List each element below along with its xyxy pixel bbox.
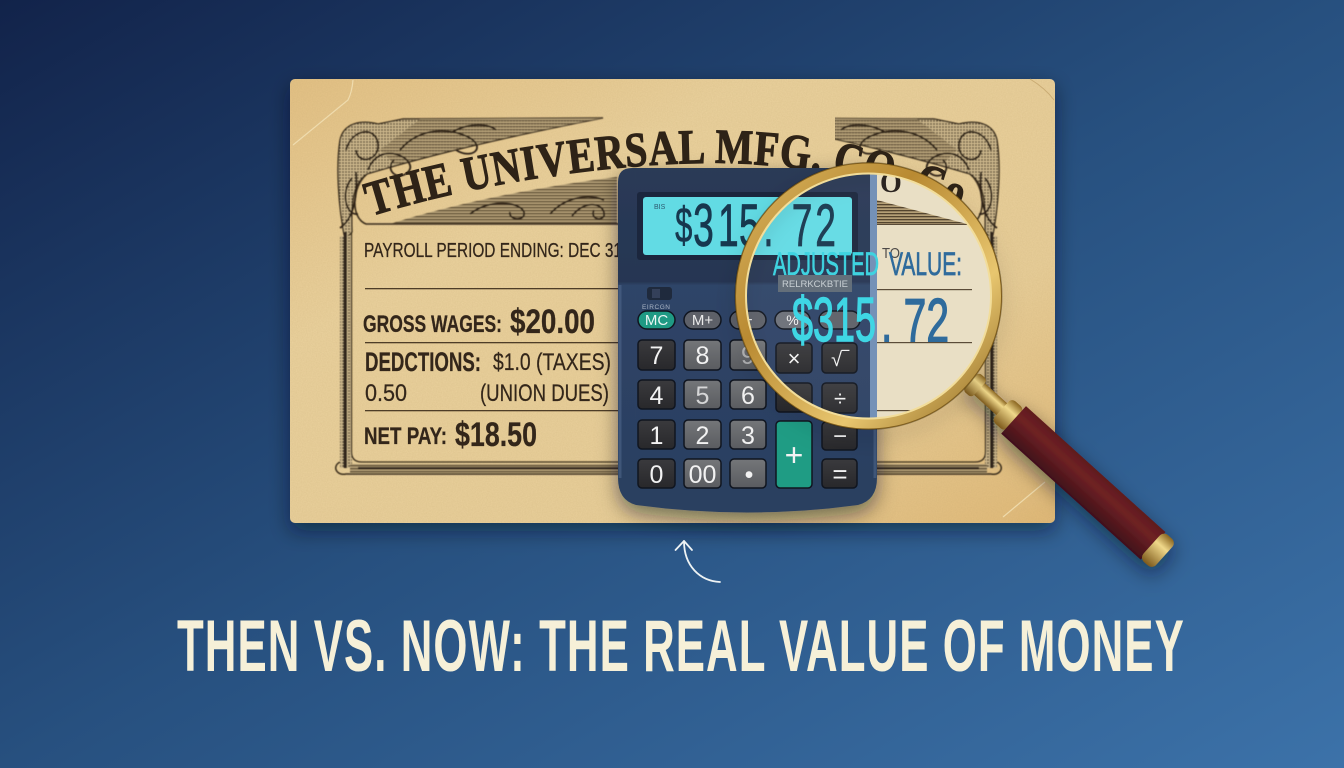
wooden grip [1001, 406, 1165, 560]
small caption chip [778, 275, 852, 292]
deductions rows: $1.0 (TAXES) [493, 349, 611, 376]
payroll period line: PAYROLL PERIOD ENDING: DEC 31 [364, 240, 622, 262]
key labels: 0 [650, 461, 663, 489]
key labels: 7 [650, 342, 663, 370]
deductions rows: DEDCTIONS: [365, 347, 481, 377]
brass end cap [1140, 531, 1176, 569]
key labels: 6 [741, 382, 755, 410]
lens contents: O [880, 168, 902, 199]
slide switch: EIRCGN [642, 304, 670, 311]
gross wages row: $20.00 [510, 303, 595, 341]
calculator display: 315.72 [693, 192, 836, 259]
lens contents [748, 174, 990, 418]
small caption chip: RELRKCKBTIE [782, 279, 848, 290]
calculator display: BIS [654, 204, 666, 211]
deductions rows [365, 347, 611, 407]
key labels: × [788, 346, 800, 371]
key labels [650, 342, 850, 489]
memory and function keys row: % [786, 312, 799, 328]
memory and function keys row: − [743, 312, 753, 329]
brass neck [970, 379, 1012, 419]
memory and function keys row: MC [645, 312, 668, 329]
key labels: ÷ [834, 386, 846, 411]
calculator [618, 168, 877, 512]
net pay row: $18.50 [455, 416, 537, 454]
key labels: 3 [741, 422, 755, 450]
lens amount: 315.72 [792, 294, 948, 346]
key labels: 00 [689, 461, 716, 489]
key labels: 9 [741, 342, 755, 370]
lens gold ring [736, 163, 1002, 429]
key labels: 2 [696, 422, 709, 450]
key labels: √‾ [831, 349, 850, 371]
panel: old pay stub [280, 76, 1067, 543]
key labels: 8 [696, 342, 709, 370]
magnifying glass lens [736, 160, 1007, 430]
net pay row [364, 416, 537, 454]
deductions rows: 0.50 [365, 380, 407, 407]
deductions rows: (UNION DUES) [480, 380, 609, 407]
calculator display: $ [675, 196, 692, 253]
calculator display [637, 192, 858, 260]
key labels: + [785, 437, 803, 473]
arrow pointing up to calculator [676, 541, 720, 582]
company name banner: THE UNIVERSAL MFG. CO. Co [362, 130, 964, 215]
magnifying glass handle [958, 367, 1177, 570]
key labels: 1 [650, 422, 663, 450]
key labels: − [833, 423, 847, 450]
key labels: 4 [650, 382, 664, 410]
lens amount: 315.72: $315 [792, 286, 876, 355]
lens heading: adjusted value: ADJUSTED [773, 246, 879, 282]
key labels: • [745, 461, 753, 489]
title: THEN VS. NOW: THE REAL VALUE OF MONEY [177, 606, 1184, 687]
memory and function keys row: M+ [692, 312, 713, 329]
memory and function keys row [638, 311, 860, 329]
key labels: = [832, 459, 848, 489]
net pay row: NET PAY: [364, 423, 447, 450]
lens heading: adjusted value: TO [882, 245, 900, 262]
number keypad [638, 340, 857, 488]
gross wages row [363, 303, 595, 341]
lens heading: adjusted value: VALUE: [889, 246, 962, 282]
gross wages row: GROSS WAGES: [363, 311, 502, 338]
ornate engraved border, right half [835, 116, 1003, 476]
key labels: 5 [696, 382, 709, 410]
lens amount: 315.72: . 72 [881, 287, 949, 356]
ornate engraved border, left half [336, 118, 620, 474]
slide switch [642, 287, 672, 311]
